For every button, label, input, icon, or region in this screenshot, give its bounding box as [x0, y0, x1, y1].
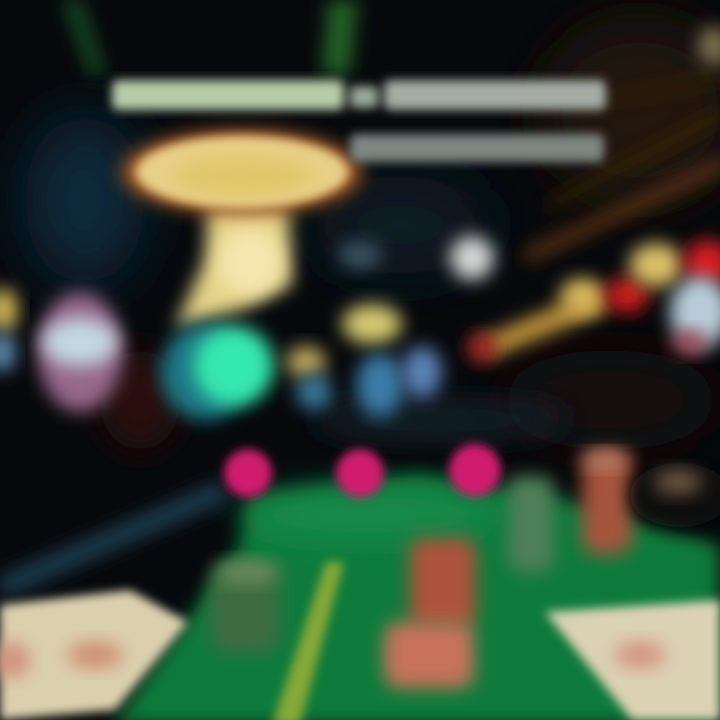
lamp cone [175, 205, 292, 328]
teal glowing orb [161, 324, 274, 420]
chip stack, green rear [508, 476, 554, 572]
table centre line [272, 562, 344, 720]
ceiling lamp disc [122, 130, 362, 214]
right marquee lights [467, 240, 720, 363]
game table [0, 474, 720, 720]
blurred title line two [350, 134, 604, 162]
background: ambient room tones [25, 0, 720, 450]
left edge light [0, 288, 18, 372]
betting card, lower left [0, 590, 188, 720]
ceiling spot, top right [698, 26, 720, 66]
blurred title line one [112, 80, 606, 110]
warm light streaks on right wall [530, 78, 720, 255]
blurred title block [112, 80, 606, 162]
chip stack, green front [210, 560, 280, 653]
pink marker dots [224, 444, 501, 497]
chip stack, red rear [582, 450, 632, 554]
betting card, lower right [545, 600, 720, 720]
chip stack, red centre [384, 538, 476, 688]
left pastel orb [38, 292, 122, 412]
dark object, right of table [630, 463, 720, 527]
small mid-row lights [286, 236, 494, 417]
